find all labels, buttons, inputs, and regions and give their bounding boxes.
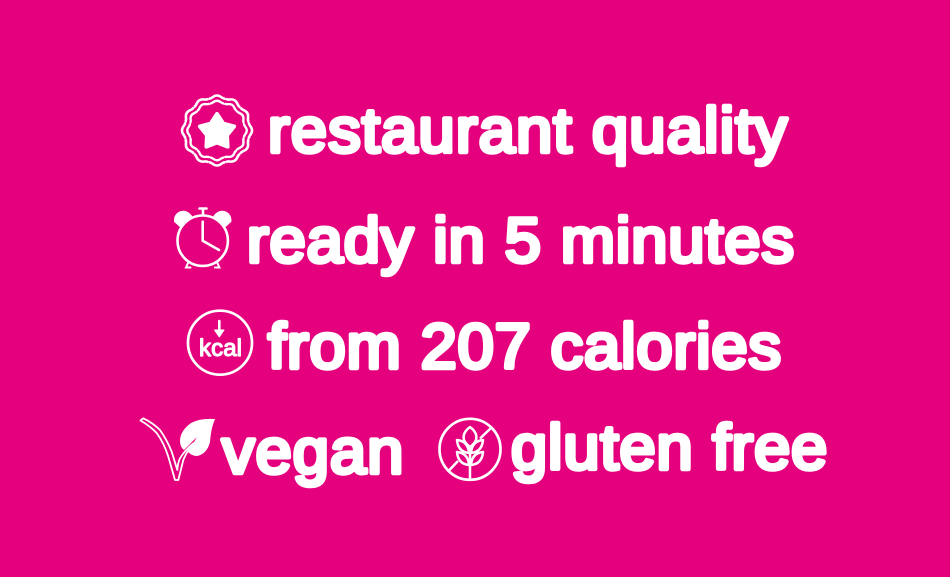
heading: ready in 5 minutes: ready in 5 minutes (247, 205, 794, 276)
heading: from 207 calories: from 207 calories (268, 311, 781, 382)
heading: restaurant quality: restaurant quality (268, 95, 787, 166)
icon: star badge (182, 96, 252, 166)
icon: alarm clock (174, 208, 231, 268)
label: gluten free: gluten free (511, 412, 827, 483)
icon: gluten free wheat (440, 419, 500, 480)
icon: kcal badge: kcal (199, 335, 242, 362)
icon: kcal badge (188, 311, 252, 375)
label: vegan: vegan (222, 416, 403, 487)
icon: vegan leaf (140, 418, 215, 480)
